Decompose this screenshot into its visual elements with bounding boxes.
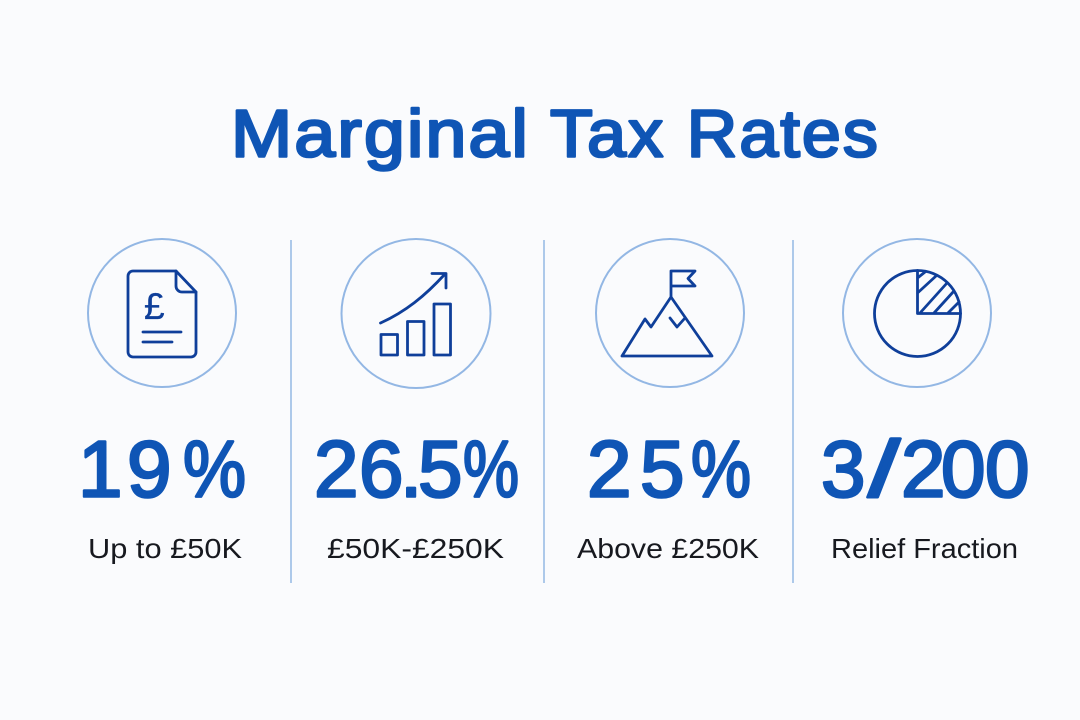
- rate: 19%: 19: [78, 424, 172, 514]
- rate: 26.5%: %: [463, 424, 519, 514]
- rate: 3/200: 200: [901, 424, 1030, 514]
- icon: pound document: [88, 239, 236, 387]
- rate: 25%: 25: [587, 424, 684, 514]
- rate: 3/200: 3: [821, 424, 866, 514]
- panel: up to 50K: [78, 239, 246, 564]
- label: 50K to 250K: £50K-£250K: [327, 533, 504, 564]
- label: relief fraction: Relief Fraction: [831, 533, 1018, 564]
- rate: 3/200: /: [868, 424, 901, 514]
- rate: 25%: %: [691, 424, 751, 514]
- panel: 50K to 250K: [314, 239, 519, 564]
- rate: 19%: %: [183, 424, 246, 514]
- panel: above 250K: [577, 239, 759, 564]
- icon: mountain with flag: [596, 239, 744, 387]
- icon: pie chart with hatched quarter: [843, 239, 991, 387]
- title: Marginal: [231, 96, 530, 172]
- title: Tax Rates: [550, 96, 880, 172]
- rate: 26.5%: 26.5: [314, 424, 462, 514]
- label: up to 50K: Up to £50K: [88, 533, 242, 564]
- label: above 250K: Above £250K: [577, 533, 759, 564]
- icon: rising bar chart: [342, 239, 490, 388]
- panel: relief fraction: [821, 239, 1030, 564]
- icon: pound document: £: [144, 286, 165, 327]
